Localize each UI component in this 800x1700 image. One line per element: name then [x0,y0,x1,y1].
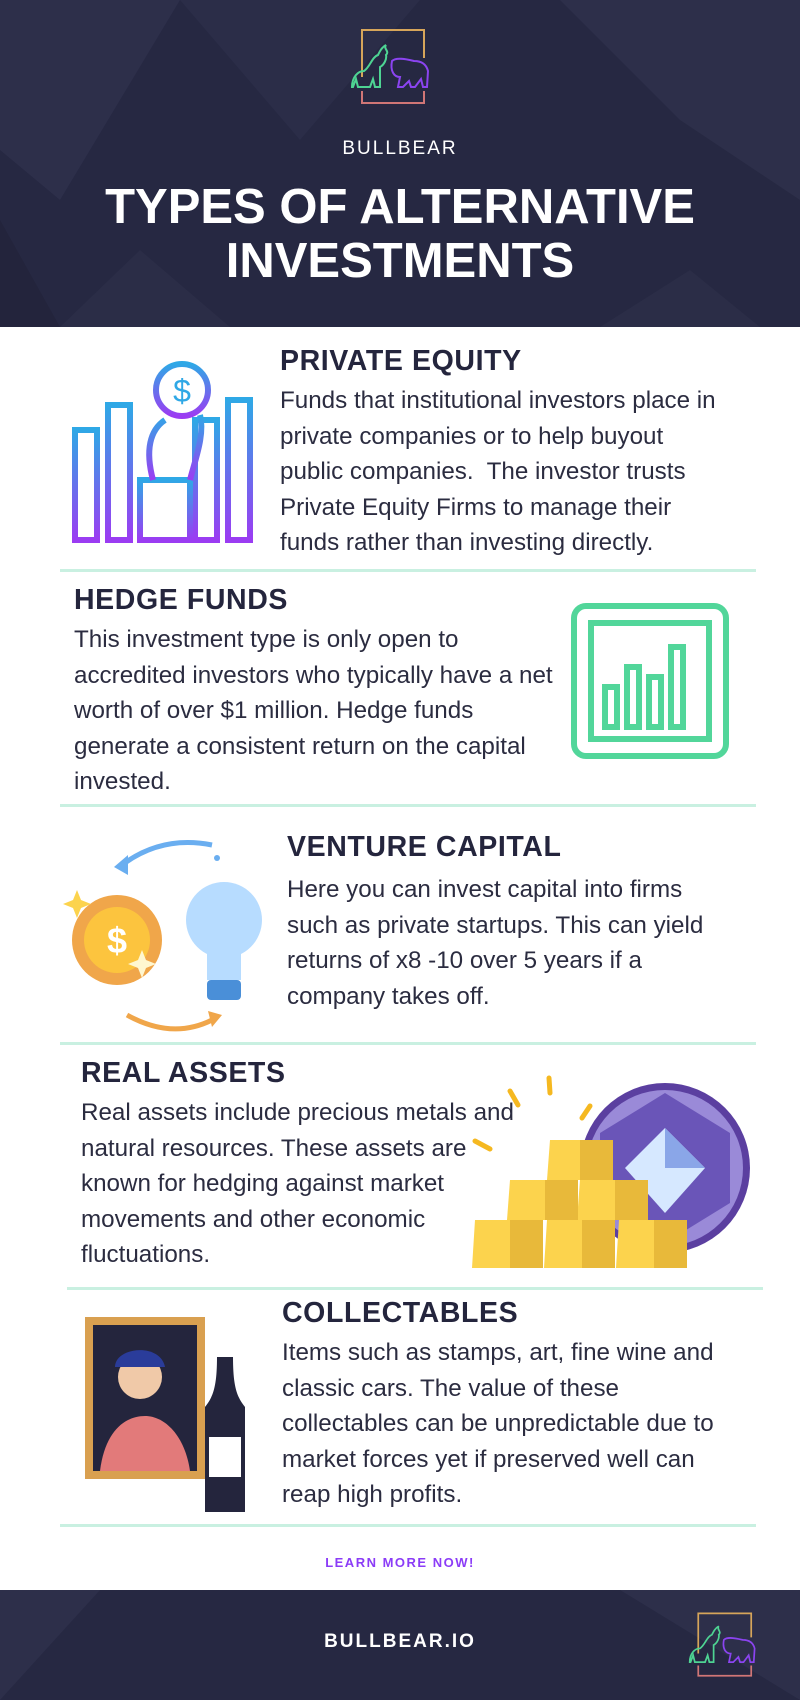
text [280,387,716,556]
title: TYPES OF ALTERNATIVE [105,180,695,234]
panel: private equity [72,345,716,556]
text [282,1339,714,1508]
icon: coin and bulb: $ [107,920,127,961]
text: generate a consistent return on the capital [74,732,526,760]
header [0,0,800,327]
text: Items such as stamps, art, fine wine and [282,1339,714,1366]
text: Real assets include precious metals and [81,1099,514,1126]
heading: PRIVATE EQUITY [280,345,522,377]
text: such as private startups. This can yield [287,912,703,938]
heading: COLLECTABLES [282,1297,518,1329]
title [105,180,695,288]
icon: chart box [571,603,729,759]
footer [0,1590,800,1700]
text: market forces yet if preserved well can [282,1446,695,1472]
logo [351,29,429,104]
text: worth of over $1 million. Hedge funds [74,697,473,724]
panel: venture capital [63,831,703,1032]
brand name: BULLBEAR [342,138,458,159]
text: collectables can be unpredictable due to [282,1410,714,1437]
text: Funds that institutional investors place in [280,387,716,414]
footer url: BULLBEAR.IO [324,1631,476,1652]
text: movements and other economic [81,1206,425,1232]
text: reap high profits. [282,1481,462,1508]
text: private companies or to help buyout [280,422,663,450]
heading: REAL ASSETS [81,1057,286,1089]
footer logo [688,1612,756,1677]
text: accredited investors who typically have a net [74,662,553,688]
icon: hand with coin and bars: $ [173,373,191,409]
panel: collectables [85,1297,714,1512]
heading: VENTURE CAPITAL [287,831,561,863]
title: INVESTMENTS [226,234,574,288]
text: public companies. The investor trusts [280,458,686,485]
text: Private Equity Firms to manage their [280,494,671,520]
text: company takes off. [287,982,490,1010]
text: invested. [74,768,171,795]
text: natural resources. These assets are [81,1134,466,1162]
text: classic cars. The value of these [282,1374,619,1402]
panel: hedge funds [74,584,729,795]
text: This investment type is only open to [74,626,459,653]
text [287,876,703,1010]
panel: real assets [81,1057,750,1268]
heading: HEDGE FUNDS [74,584,288,616]
text: Here you can invest capital into firms [287,876,682,903]
text: known for hedging against market [81,1170,444,1197]
text: funds rather than investing directly. [280,529,653,556]
text: returns of x8 -10 over 5 years if a [287,947,642,974]
icon: hand with coin and bars [72,361,253,543]
icon: gold bars and gem [472,1076,750,1268]
text: fluctuations. [81,1241,210,1268]
icon: painting and wine bottle [85,1317,245,1512]
icon: coin and bulb [63,840,262,1032]
text [81,1099,514,1268]
text [74,626,553,795]
call to action: LEARN MORE NOW! [325,1555,475,1570]
